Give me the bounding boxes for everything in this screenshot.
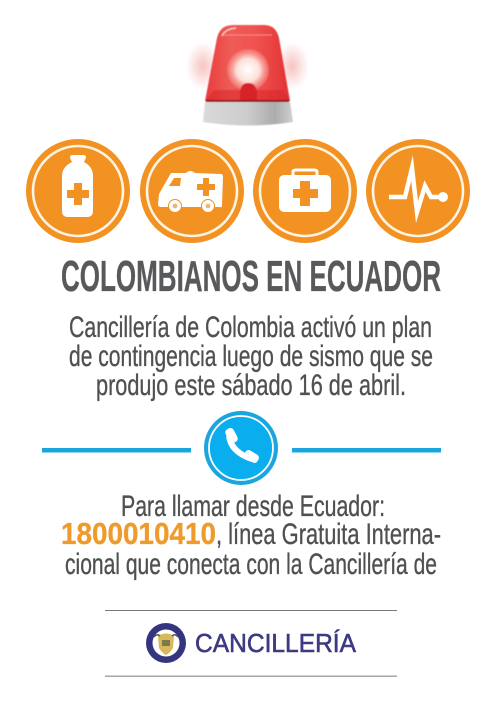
contact text block <box>61 490 441 581</box>
phone divider right line <box>292 448 441 452</box>
intro text block <box>69 311 433 402</box>
icon: medicine bottle <box>26 139 130 243</box>
logo wordmark: CANCILLERÍA <box>195 628 357 658</box>
contact text block: Para llamar desde Ecuador: <box>121 490 385 523</box>
icon: heartbeat <box>366 139 470 243</box>
icon: telephone <box>204 411 278 485</box>
icon: red siren <box>186 25 309 126</box>
icon: first aid kit <box>253 139 357 243</box>
phone divider left line <box>42 448 191 452</box>
icon: ambulance <box>140 139 244 243</box>
bottom footer rule <box>105 676 397 677</box>
phone number: 1800010410 <box>61 516 216 551</box>
top footer rule <box>105 610 397 611</box>
icon: Colombia coat of arms seal <box>146 623 186 663</box>
